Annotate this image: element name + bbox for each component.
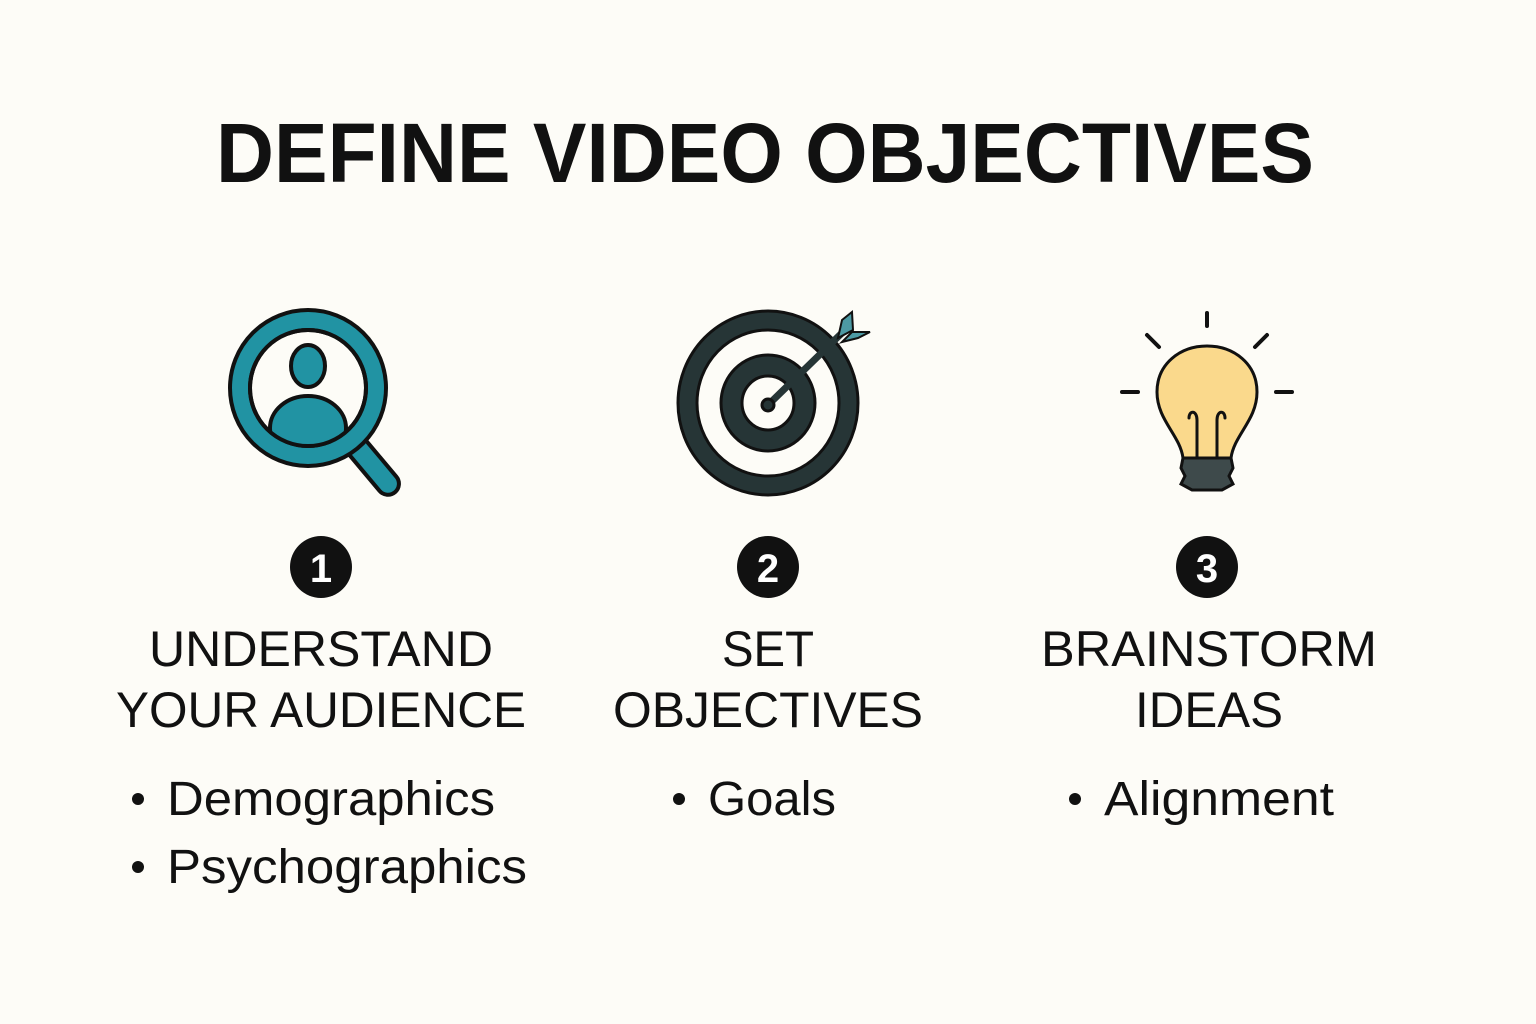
bullets: audience: Demographics [167,773,495,826]
bullets: objectives: Goals [708,773,836,826]
heading: set objectives [613,621,923,738]
title: DEFINE VIDEO OBJECTIVES [216,106,1314,200]
heading: understand your audience: YOUR AUDIENCE [116,682,526,738]
number badge 1 [290,536,352,598]
heading: understand your audience: UNDERSTAND [149,621,493,677]
number badge 2 [737,536,799,598]
heading: set objectives: OBJECTIVES [613,682,923,738]
number badge 3: 3 [1196,547,1218,591]
icon: magnifier with person [230,310,403,499]
number badge 1: 1 [310,547,332,591]
icon: light bulb [1122,313,1292,490]
heading: brainstorm ideas [1041,621,1377,738]
heading: brainstorm ideas: BRAINSTORM [1041,621,1377,677]
bullets: ideas: Alignment [1104,773,1334,826]
icon: target with arrow [678,311,870,495]
number badge 2: 2 [757,547,779,591]
bullets: audience: Psychographics [167,841,527,894]
heading: brainstorm ideas: IDEAS [1135,682,1283,738]
bullets: audience [132,773,527,894]
number badge 3 [1176,536,1238,598]
heading: set objectives: SET [722,621,814,677]
heading: understand your audience [116,621,526,738]
